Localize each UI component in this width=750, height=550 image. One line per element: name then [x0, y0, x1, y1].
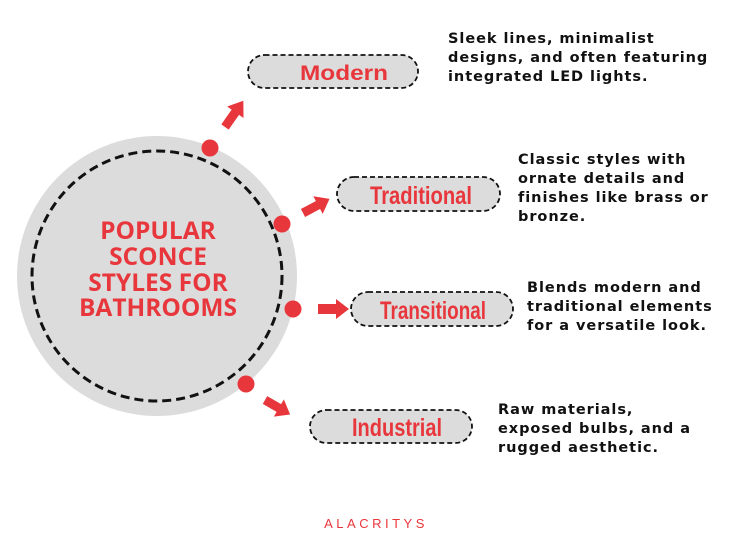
text: transitional: Blends modern and	[527, 280, 702, 296]
title: SCONCE	[109, 240, 207, 273]
text: transitional: traditional elements	[527, 299, 713, 315]
text: traditional: ornate details and	[518, 171, 685, 187]
title: BATHROOMS	[79, 291, 237, 324]
footer brand: ALACRITYS	[324, 516, 428, 531]
pill: Traditional: Traditional	[370, 182, 472, 210]
pill: Industrial	[310, 410, 472, 443]
arrows	[217, 95, 349, 423]
central circle	[17, 136, 297, 416]
title: STYLES FOR	[88, 266, 229, 299]
text: traditional: bronze.	[518, 209, 586, 225]
pill: Modern	[248, 55, 418, 88]
pill: Industrial: Industrial	[352, 414, 442, 442]
pill: Modern: Modern	[300, 62, 388, 85]
pill: Transitional: Transitional	[380, 297, 486, 325]
pill: Traditional	[337, 177, 500, 211]
text: transitional: for a versatile look.	[527, 318, 707, 334]
text: traditional: finishes like brass or	[518, 190, 709, 206]
text: industrial: Raw materials,	[498, 402, 633, 418]
text: industrial: rugged aesthetic.	[498, 440, 659, 456]
text: modern: designs, and often featuring	[448, 50, 708, 66]
title: POPULAR	[100, 214, 217, 247]
text: modern: Sleek lines, minimalist	[448, 31, 655, 47]
text: traditional: Classic styles with	[518, 152, 686, 168]
dots	[202, 140, 302, 392]
text: industrial: exposed bulbs, and a	[498, 421, 691, 437]
text: modern: integrated LED lights.	[448, 69, 648, 85]
pill: Transitional	[351, 292, 513, 326]
